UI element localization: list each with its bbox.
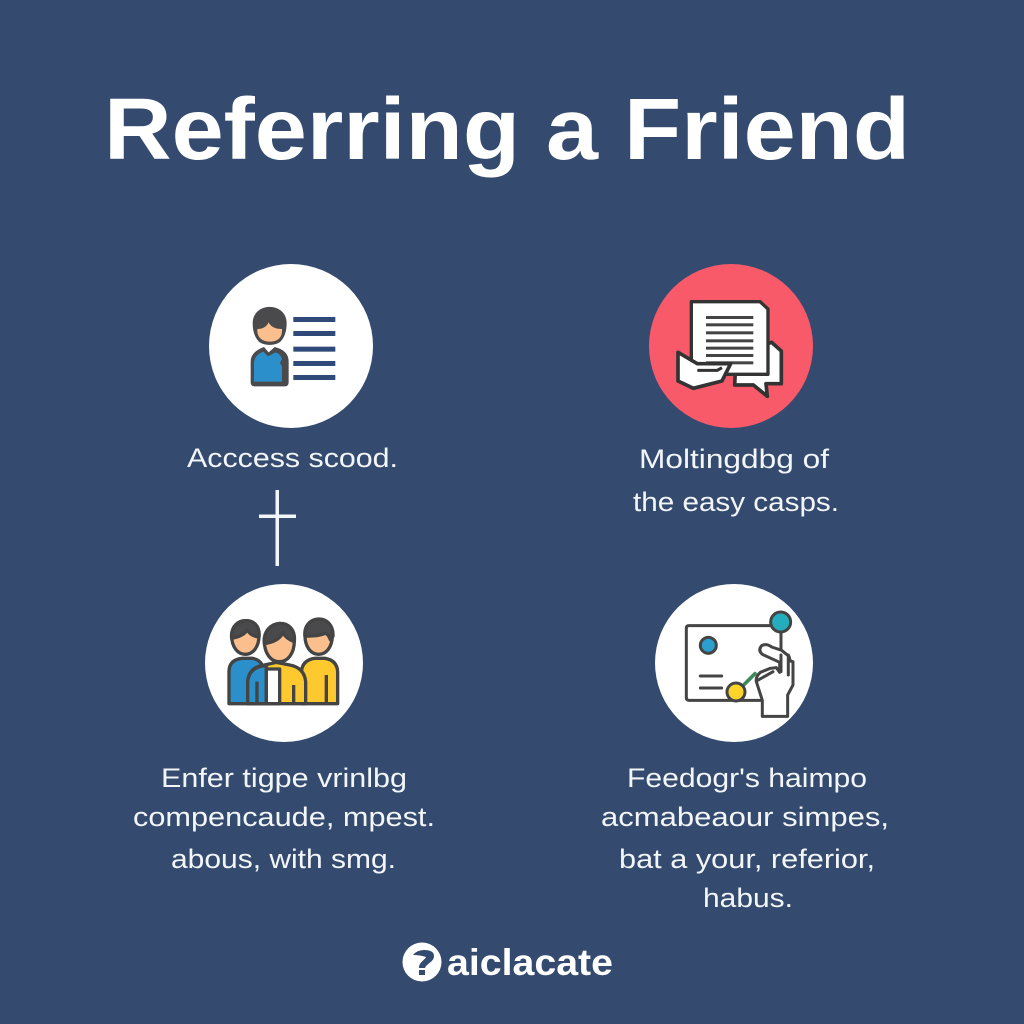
text: feedback caption: habus. — [703, 883, 793, 913]
icon: card with hand — [655, 584, 813, 742]
logo — [402, 942, 613, 983]
text: friends caption: Enfer tigpe vrinlbg — [161, 763, 407, 793]
panel: feedback — [601, 584, 889, 913]
text: feedback caption — [601, 763, 889, 913]
text: feedback caption: acmabeaour simpes, — [601, 802, 889, 832]
icon: three people — [205, 584, 363, 742]
text: feedback caption: Feedogr's haimpo — [627, 763, 867, 793]
text: feedback caption: bat a your, referior, — [619, 844, 875, 874]
panel: access — [187, 264, 398, 473]
title: Referring a Friend — [104, 81, 910, 178]
text: friends caption: compencaude, mpest. — [133, 802, 435, 832]
text: friends caption: abous, with smg. — [171, 844, 396, 874]
panel: friends — [133, 584, 435, 874]
text: easy steps caption — [633, 444, 839, 517]
logo wordmark: aiclacate — [447, 942, 613, 983]
panel: easy steps — [633, 264, 839, 517]
text: access caption: Acccess scood. — [187, 443, 398, 473]
arrow: vertical connector cross — [259, 490, 296, 566]
text: friends caption — [133, 763, 435, 874]
icon: logo badge — [402, 942, 442, 982]
text: easy steps caption: the easy casps. — [633, 487, 839, 517]
text: easy steps caption: Moltingdbg of — [639, 444, 830, 474]
icon: document with speech bubble — [649, 264, 813, 428]
icon: person with list — [209, 264, 373, 428]
